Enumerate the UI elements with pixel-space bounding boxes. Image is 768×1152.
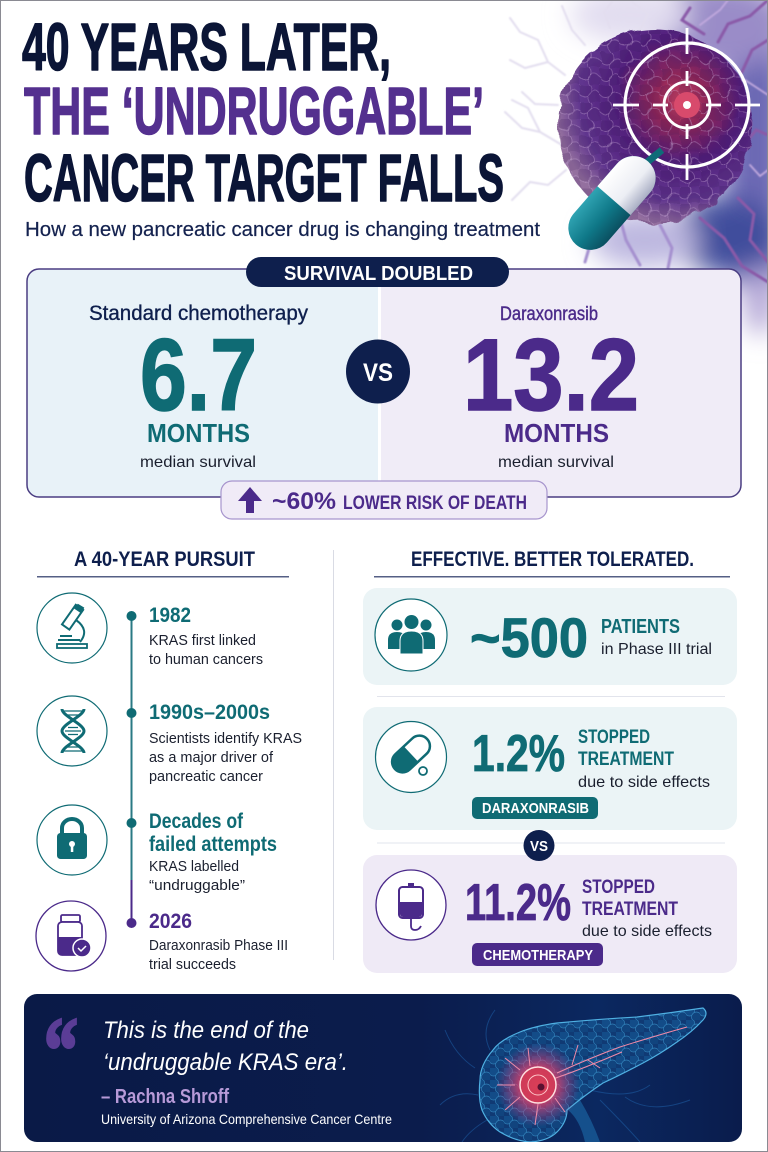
- entry: 1990s-2000s: pancreatic cancer: [149, 768, 263, 785]
- quote text: [103, 1017, 348, 1076]
- daraxonrasib column: Daraxonrasib: [500, 304, 598, 325]
- entry: 1990s-2000s: [149, 701, 302, 785]
- title: [22, 10, 504, 216]
- tolerability heading: EFFECTIVE. BETTER TOLERATED.: [411, 548, 694, 571]
- column divider: [333, 550, 334, 960]
- entry: 1982: to human cancers: [149, 651, 263, 668]
- card: chemotherapy discontinuation: due to side effects: [582, 923, 712, 940]
- icon: capsule: [376, 722, 446, 792]
- target reticle: [613, 28, 760, 180]
- subtitle: How a new pancreatic cancer drug is changing treatment: [25, 219, 540, 241]
- card: trial size: in Phase III trial: [601, 641, 712, 658]
- label: chemotherapy: CHEMOTHERAPY: [483, 947, 593, 964]
- entry: decades of failed attempts: [149, 810, 277, 894]
- timeline heading: A 40-YEAR PURSUIT: [74, 548, 255, 571]
- entry: 1990s-2000s: 1990s–2000s: [149, 701, 270, 724]
- icon: quotation mark: “: [44, 999, 78, 1101]
- card: daraxonrasib discontinuation: 1.2%: [472, 725, 565, 783]
- attribution: – Rachna Shroff: [101, 1086, 229, 1108]
- entry: 2026: trial succeeds: [149, 956, 236, 973]
- attribution: University of Arizona Comprehensive Cancer Centre: [101, 1111, 392, 1127]
- survival doubled badge: SURVIVAL DOUBLED: [284, 263, 473, 285]
- icon: patients group: [375, 599, 447, 671]
- card: chemotherapy discontinuation: TREATMENT: [582, 899, 678, 920]
- separator with vs badge: [377, 830, 725, 861]
- entry: decades of failed attempts: Decades of: [149, 810, 244, 833]
- card: daraxonrasib discontinuation: STOPPED: [578, 727, 650, 748]
- attribution: [101, 1086, 392, 1127]
- standard chemotherapy column: 6.7: [140, 318, 257, 432]
- tumour cell: [558, 29, 752, 223]
- capsule: [559, 147, 665, 259]
- card: chemotherapy discontinuation: 11.2%: [465, 874, 571, 932]
- quote text: ‘undruggable KRAS era’.: [103, 1049, 348, 1076]
- pancreas illustration: [440, 1008, 706, 1142]
- card: daraxonrasib discontinuation: [363, 707, 737, 830]
- panel: timeline: [36, 548, 302, 973]
- daraxonrasib column: 13.2: [463, 318, 639, 432]
- separator with vs badge: VS: [530, 838, 548, 855]
- icon: drug vial: [36, 901, 106, 971]
- daraxonrasib column: [463, 304, 639, 471]
- risk reduction callout: [221, 481, 547, 519]
- risk reduction callout: ~60%: [272, 488, 336, 515]
- panel: survival comparison: [27, 257, 741, 519]
- entry: 1990s-2000s: as a major driver of: [149, 749, 274, 766]
- quote text: This is the end of the: [103, 1017, 309, 1044]
- panel: quote banner: [24, 994, 742, 1142]
- panel: safety and tolerability: [363, 548, 737, 973]
- card: trial size: [363, 588, 737, 685]
- icon: padlock: [37, 805, 107, 875]
- label: daraxonrasib: [472, 797, 598, 819]
- standard chemotherapy column: median survival: [140, 454, 256, 471]
- entry: 2026: Daraxonrasib Phase III: [149, 937, 288, 954]
- entry: decades of failed attempts: “undruggable”: [149, 877, 245, 894]
- icon: iv bag: [376, 870, 446, 940]
- icon: dna helix: [37, 696, 107, 766]
- card: daraxonrasib discontinuation: due to side effects: [578, 774, 710, 791]
- vs badge: [346, 340, 410, 404]
- hero illustration: targeted cancer cell and capsule: [505, 0, 768, 335]
- standard chemotherapy column: [89, 302, 308, 471]
- entry: 1982: [149, 604, 263, 668]
- title: 40 YEARS LATER,: [22, 10, 391, 85]
- background haze: [570, 0, 768, 335]
- card: chemotherapy discontinuation: [363, 855, 737, 973]
- risk reduction callout: LOWER RISK OF DEATH: [343, 493, 527, 514]
- vs badge: VS: [363, 359, 393, 387]
- daraxonrasib column: MONTHS: [504, 418, 609, 448]
- standard chemotherapy column: MONTHS: [147, 418, 250, 448]
- entry: 2026: 2026: [149, 910, 192, 933]
- entry: 1990s-2000s: Scientists identify KRAS: [149, 730, 302, 747]
- daraxonrasib column: median survival: [498, 454, 614, 471]
- entry: 1982: KRAS first linked: [149, 632, 256, 649]
- icon: microscope: [37, 593, 107, 663]
- label: daraxonrasib: DARAXONRASIB: [482, 800, 589, 817]
- label: chemotherapy: [472, 943, 603, 966]
- standard chemotherapy column: Standard chemotherapy: [89, 302, 308, 325]
- nerve-like veins: [505, 0, 768, 282]
- card: chemotherapy discontinuation: STOPPED: [582, 877, 655, 898]
- timeline axis: [126, 611, 136, 928]
- entry: 1982: 1982: [149, 604, 191, 627]
- title: THE ‘UNDRUGGABLE’: [24, 74, 484, 149]
- card: trial size: PATIENTS: [601, 616, 680, 638]
- entry: decades of failed attempts: failed attempts: [149, 833, 277, 856]
- entry: decades of failed attempts: KRAS labelled: [149, 858, 239, 875]
- separator: [377, 696, 725, 697]
- card: trial size: ~500: [470, 606, 588, 669]
- entry: 2026: [149, 910, 288, 973]
- card: daraxonrasib discontinuation: TREATMENT: [578, 749, 674, 770]
- survival doubled badge: [246, 257, 509, 287]
